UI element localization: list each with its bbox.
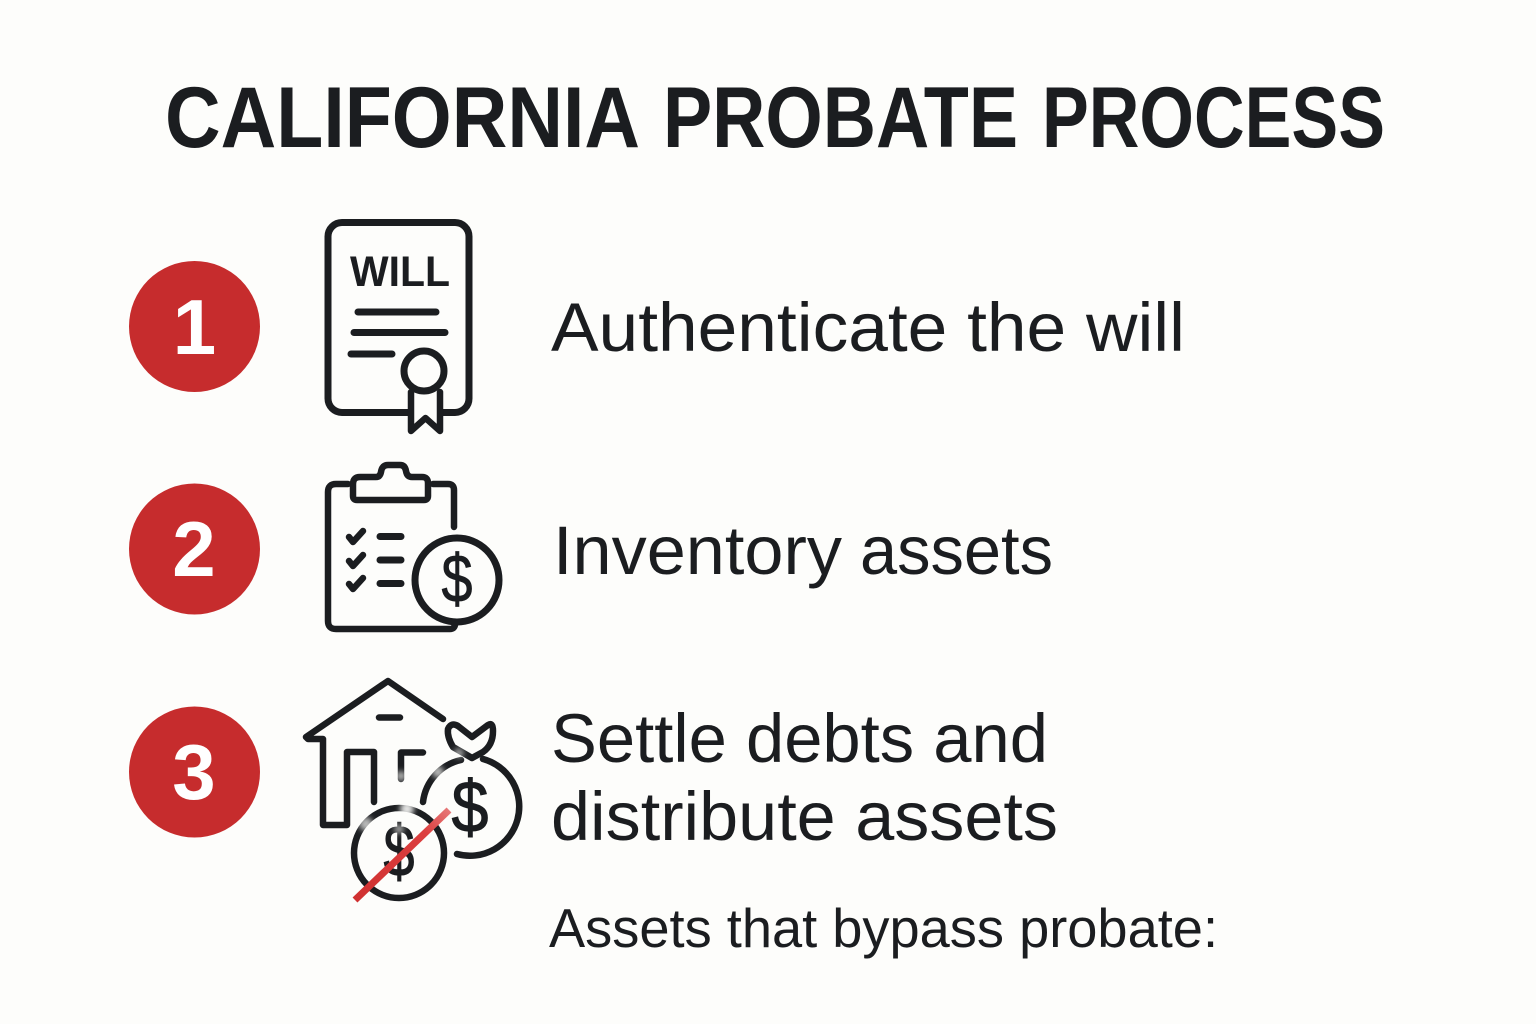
title: [165, 70, 1385, 166]
step 3: [129, 681, 1048, 900]
step 2 number badge: 2: [172, 505, 216, 593]
icon: house, money bag and crossed-out coin: [306, 681, 519, 900]
step 3 number badge: [129, 706, 260, 838]
step 3 number badge: 3: [172, 728, 216, 816]
icon: house, money bag and crossed-out coin: $: [384, 812, 414, 892]
icon: will document with seal: WILL: [350, 248, 450, 296]
icon: clipboard checklist with dollar coin: $: [442, 541, 472, 617]
icon: house, money bag and crossed-out coin: $: [452, 767, 488, 848]
step 3 label: Settle debts and: [551, 700, 1048, 777]
assets note: Assets that bypass probate:: [549, 897, 1218, 959]
title: CALIFORNIA: [165, 70, 640, 166]
step 2: [129, 465, 1053, 629]
step 1 label: Authenticate the will: [551, 289, 1185, 366]
title: PROBATE: [663, 70, 1018, 166]
step 1: [129, 222, 1185, 431]
step 3 label second line: distribute assets: [551, 778, 1058, 855]
step 2 label: Inventory: [553, 512, 842, 589]
title: PROCESS: [1042, 70, 1385, 166]
red strike-through: [355, 810, 449, 900]
step 1 number badge: 1: [173, 283, 216, 371]
step 2 label: assets: [860, 512, 1053, 589]
step 1 number badge: [129, 261, 260, 392]
icon: will document with seal: [328, 222, 469, 431]
icon: clipboard checklist with dollar coin: [328, 465, 499, 629]
step 2 number badge: [129, 484, 260, 614]
fade highlights: [359, 748, 464, 834]
step 2 label: [553, 512, 1053, 589]
